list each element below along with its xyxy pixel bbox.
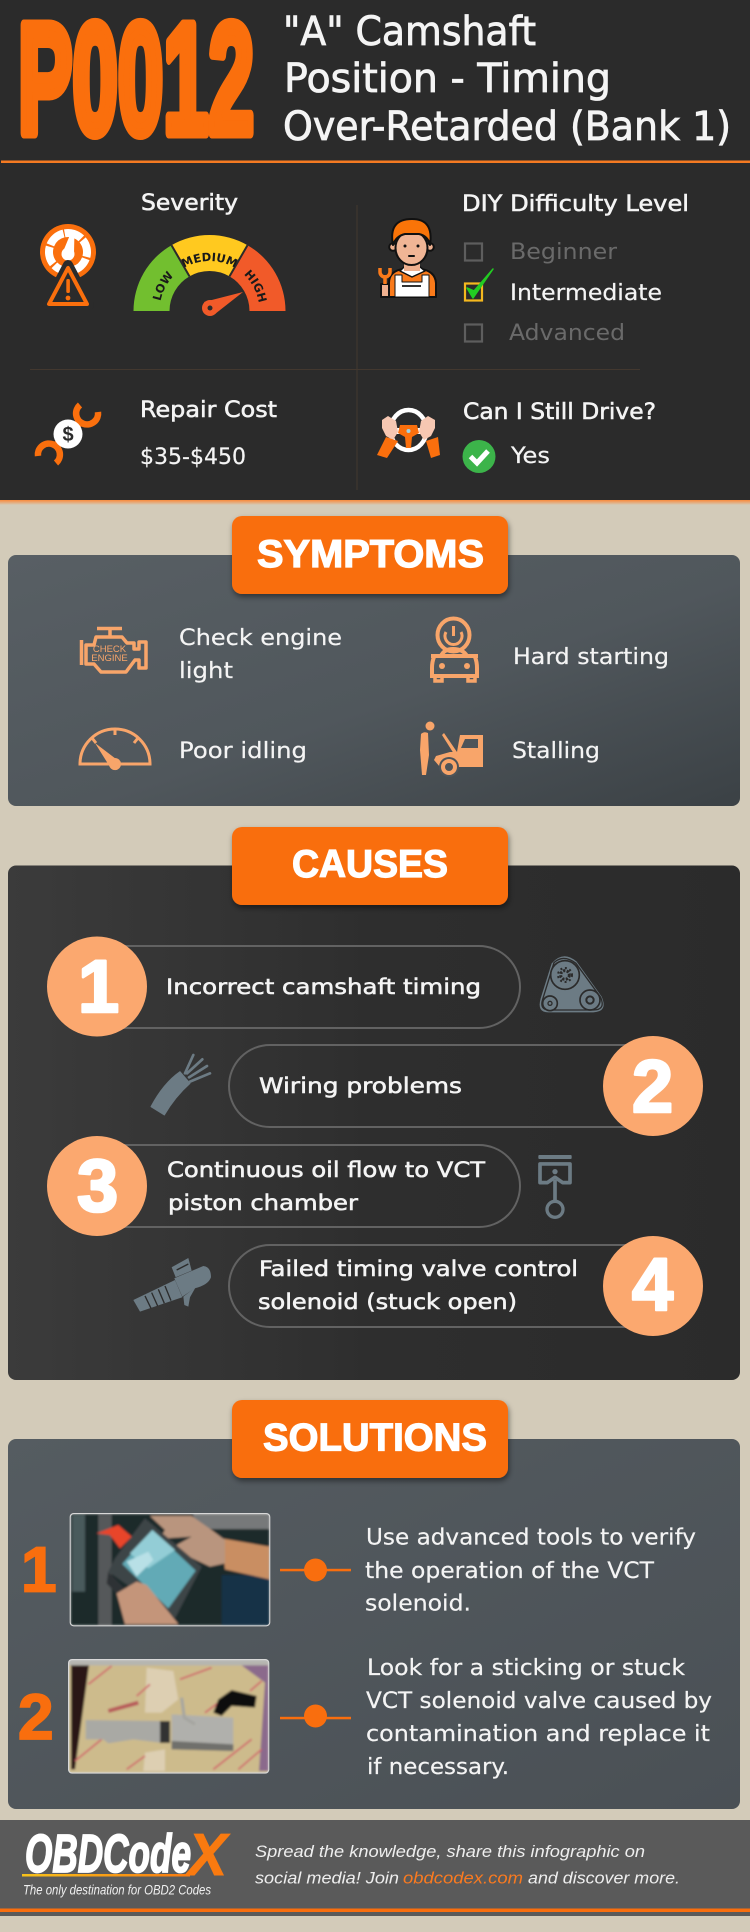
cause 1: 1 [78, 945, 119, 1028]
icon: green check [462, 440, 496, 473]
symptom text: check engine light: Check engine [179, 626, 342, 651]
cause 4: Failed timing valve control [259, 1257, 578, 1281]
cause 4 [229, 1236, 703, 1336]
option: advanced: Advanced [509, 321, 625, 346]
footer message: obdcodex.com [403, 1870, 523, 1888]
option: beginner: Beginner [510, 240, 618, 265]
symptom text: check engine light [179, 626, 342, 684]
repair cost block: Repair Cost [140, 398, 277, 423]
severity gauge chart: HIGH [244, 270, 267, 302]
icon: mechanic [380, 219, 436, 297]
solution 2 text: contamination and replace it [366, 1722, 710, 1747]
photo: VCT solenoid on box [68, 1659, 269, 1774]
cause 3: piston chamber [168, 1191, 358, 1215]
cause 4: 4 [632, 1243, 673, 1326]
panel: causes [8, 827, 740, 1380]
icon: severity warning gauge [40, 224, 96, 305]
icon: person stalled car [420, 722, 483, 777]
drive status block: Can I Still Drive? [463, 400, 656, 425]
heading: code description: Over-Retarded (Bank 1) [283, 104, 731, 150]
logo: X [185, 1822, 231, 1888]
heading: code description: "A" Camshaft [283, 9, 536, 55]
solution 1 text: solenoid. [365, 1592, 471, 1616]
symptom text: stalling: Stalling [512, 739, 600, 764]
difficulty options [465, 240, 662, 346]
DIY difficulty heading: DIY Difficulty Level [462, 192, 689, 217]
icon: piston [538, 1155, 572, 1217]
symptom text: poor idling: Poor idling [179, 739, 307, 764]
photo: technician using scan tablet [70, 1513, 270, 1626]
cause 4: solenoid (stuck open) [258, 1290, 517, 1314]
solution 1 text: the operation of the VCT [365, 1559, 655, 1584]
option: intermediate selected [465, 269, 662, 306]
solution 2 text: VCT solenoid valve caused by [366, 1689, 712, 1714]
heading: code description: Position - Timing [284, 56, 611, 102]
heading: code description [283, 9, 731, 150]
option: beginner [465, 240, 618, 265]
repair cost block [140, 398, 277, 470]
solution 2 text [366, 1656, 712, 1780]
footer message: and discover more. [528, 1870, 680, 1888]
logo [22, 1822, 231, 1898]
icon: check engine [82, 628, 146, 672]
icon: timing belt [540, 956, 604, 1012]
gauge needle [202, 292, 243, 316]
cause 3: Continuous oil flow to VCT [167, 1158, 485, 1182]
causes heading [232, 827, 508, 905]
solution 2 number: 2 [18, 1681, 54, 1753]
icon: steering wheel hands [377, 410, 440, 458]
solution 1 number: 1 [21, 1534, 57, 1606]
header panel [0, 0, 750, 505]
solutions heading: SOLUTIONS [263, 1416, 487, 1460]
symptoms heading: SYMPTOMS [257, 533, 484, 576]
icon: repair cost wrench [38, 405, 98, 463]
logo: The only destination for OBD2 Codes [23, 1882, 211, 1898]
connector 1 [280, 1558, 351, 1582]
solution 1 text: Use advanced tools to verify [366, 1526, 696, 1550]
icon: repair cost wrench: $ [62, 424, 74, 446]
footer message [255, 1843, 680, 1888]
cause 2: Wiring problems [259, 1074, 462, 1098]
logo: OBDCode [25, 1824, 191, 1884]
solution 1 text [365, 1526, 696, 1616]
cause 1: Incorrect camshaft timing [166, 975, 481, 999]
causes heading: CAUSES [292, 843, 448, 886]
severity gauge chart: LOW [152, 270, 172, 300]
severity label: Severity [141, 191, 238, 216]
panel: symptoms [8, 516, 740, 806]
icon: solenoid [133, 1258, 211, 1312]
icon: check engine: ENGINE [91, 653, 128, 664]
severity gauge chart [134, 235, 286, 316]
cause 1 [47, 936, 520, 1036]
solution 2 text: if necessary. [367, 1755, 509, 1780]
footer [0, 1820, 750, 1916]
symptoms heading [232, 516, 508, 594]
connector 2 [280, 1704, 351, 1728]
panel: solutions [8, 1400, 740, 1809]
cause 3 [47, 1136, 520, 1236]
solutions heading [232, 1400, 508, 1478]
icon: check engine: CHECK [93, 644, 127, 655]
cause 2: 2 [632, 1045, 673, 1128]
footer message: Spread the knowledge, share this infographic on [255, 1843, 645, 1861]
icon: wire [151, 1055, 210, 1115]
answer: Yes [510, 444, 550, 469]
option: advanced [465, 321, 625, 346]
cost value: $35-$450 [140, 445, 246, 470]
icon: speedometer [80, 729, 150, 770]
symptom text: hard starting: Hard starting [513, 645, 669, 670]
footer message: social media! Join [255, 1870, 399, 1888]
icon: hard starting car [431, 618, 478, 681]
severity gauge chart: MEDIUM [181, 252, 238, 268]
cause 3: 3 [77, 1144, 118, 1227]
drive status block [462, 400, 656, 473]
symptom text: check engine light: light [179, 659, 233, 684]
option: intermediate selected: Intermediate [510, 281, 662, 306]
cause 2 [229, 1036, 703, 1136]
solution 2 text: Look for a sticking or stuck [367, 1656, 685, 1681]
